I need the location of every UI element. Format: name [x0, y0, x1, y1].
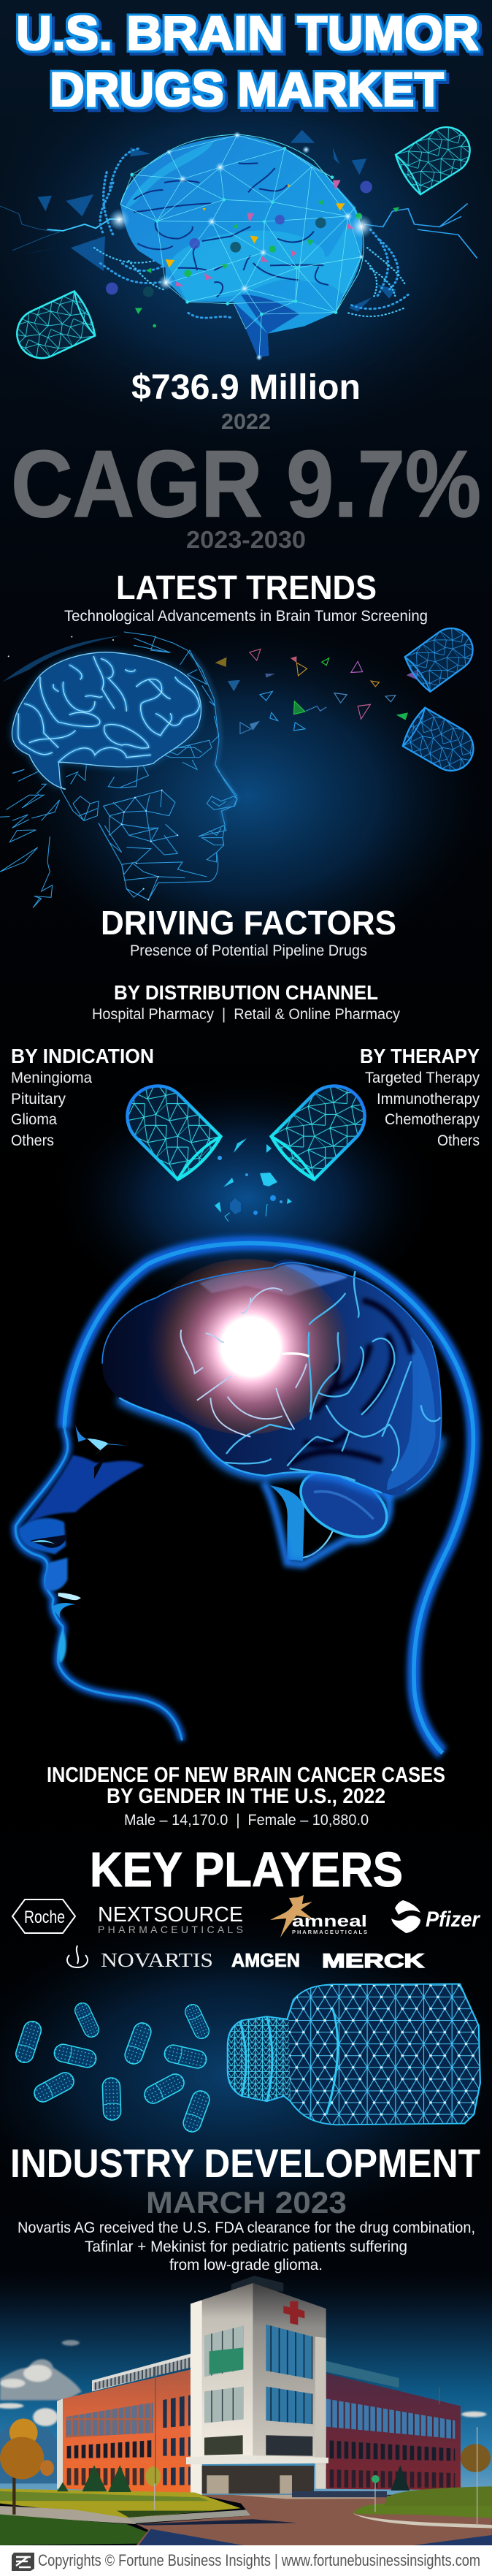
logo: Roche: Roche: [24, 1908, 65, 1927]
development description: from low-grade glioma.: [169, 2257, 323, 2274]
mesh face and neck: [0, 632, 237, 908]
footer bar: [0, 2545, 492, 2576]
distribution channel heading: BY DISTRIBUTION CHANNEL: [114, 981, 378, 1004]
right wing: [326, 2361, 399, 2388]
logo: Amneal: [270, 1895, 367, 1937]
indication list: Glioma: [11, 1111, 57, 1128]
therapy heading: BY THERAPY: [360, 1045, 480, 1067]
logo: Pfizer: Pfizer: [426, 1908, 481, 1932]
panel: by indication: [11, 1045, 154, 1149]
base year: 2022: [221, 410, 271, 434]
market size value: $736.9 Million: [131, 368, 361, 407]
red cross: [283, 2301, 304, 2325]
logo: Merck: MERCK: [322, 1950, 425, 1972]
head outline and face: [15, 1243, 473, 1753]
capsule half bottom left: [9, 290, 98, 366]
logo: Novartis: NOVARTIS: [101, 1949, 213, 1971]
bottle: [228, 1984, 480, 2125]
illustration: low-poly brain with capsule halves: [0, 118, 479, 366]
indication list: Meningioma: [11, 1070, 92, 1086]
indication heading: BY INDICATION: [11, 1045, 154, 1067]
therapy list: Chemotherapy: [385, 1111, 480, 1128]
capsule half top right: [393, 118, 479, 197]
illustration: mesh head with glowing brain: [0, 620, 482, 908]
footer logo: [12, 2553, 34, 2571]
tower windows: [204, 2325, 243, 2377]
tower: [231, 2276, 283, 2292]
therapy list: Immunotherapy: [377, 1091, 480, 1108]
driving factors heading: DRIVING FACTORS: [101, 904, 396, 942]
illustration: glowing head with tumor: [15, 1243, 473, 1753]
left wing: [92, 2354, 191, 2391]
brain polygon: [106, 132, 399, 361]
logo: Roche: [12, 1899, 75, 1933]
panel: by therapy: [360, 1045, 480, 1149]
forecast period: 2023-2030: [186, 526, 306, 553]
title: DRUGS MARKET: [50, 62, 444, 116]
distribution channel items: Hospital Pharmacy | Retail & Online Pharmacy: [92, 1006, 400, 1023]
grounds and road: [0, 2475, 492, 2545]
driving factors text: Presence of Potential Pipeline Drugs: [130, 942, 367, 959]
development description: Novartis AG received the U.S. FDA clearance for the drug combination,: [18, 2219, 475, 2236]
particles: [215, 1138, 292, 1222]
development description: Tafinlar + Mekinist for pediatric patients suffering: [85, 2238, 407, 2255]
capsules: [14, 2019, 43, 2065]
therapy list: Targeted Therapy: [365, 1070, 480, 1086]
incidence heading: INCIDENCE OF NEW BRAIN CANCER CASES: [47, 1764, 445, 1787]
logo: NextSource: PHARMACEUTICALS: [98, 1924, 243, 1935]
key players heading: KEY PLAYERS: [90, 1843, 403, 1897]
indication list: Pituitary: [11, 1091, 66, 1108]
incidence values: Male – 14,170.0 | Female – 10,880.0: [124, 1812, 369, 1829]
surrounding fragments, sparks and particles: [0, 130, 477, 319]
latest trends text: Technological Advancements in Brain Tumor Screening: [64, 608, 428, 625]
capsule half left: [115, 1073, 224, 1183]
sky: [0, 2269, 492, 2495]
logo: Pfizer: [391, 1900, 481, 1933]
floating triangles: [215, 649, 419, 733]
panel: company logos: [12, 1895, 481, 1972]
illustration: hospital building: [0, 2269, 492, 2545]
logo: Amgen: AMGEN: [231, 1949, 300, 1971]
capsule half upper: [402, 620, 481, 693]
title: [16, 6, 479, 116]
glowing brain: [12, 652, 201, 789]
brain with tumor glow: [102, 1259, 441, 1495]
building wings and tower: [57, 2276, 461, 2495]
capsule half lower: [400, 706, 482, 779]
title: U.S. BRAIN TUMOR: [16, 6, 479, 60]
logo: NextSource: NEXTSOURCE: [98, 1903, 243, 1927]
date: MARCH 2023: [146, 2185, 347, 2219]
clouds and mountains: [0, 2340, 487, 2483]
latest trends heading: LATEST TRENDS: [116, 568, 377, 606]
capsule half right: [268, 1073, 377, 1183]
incidence heading: BY GENDER IN THE U.S., 2022: [107, 1785, 385, 1808]
logo: Amneal: amneal: [292, 1912, 367, 1930]
development description: [18, 2219, 475, 2274]
indication list: Others: [11, 1132, 54, 1149]
therapy list: Others: [437, 1132, 480, 1149]
trees: [0, 2366, 491, 2526]
illustration: pill bottle with capsules: [14, 1984, 480, 2134]
logo: Novartis: [67, 1946, 213, 1971]
logo: Amneal: PHARMACEUTICALS: [292, 1929, 367, 1935]
illustration: open capsule with falling particles: [115, 1073, 377, 1222]
incidence heading: [47, 1764, 445, 1808]
indication list: [11, 1070, 92, 1149]
therapy list: [365, 1070, 480, 1149]
